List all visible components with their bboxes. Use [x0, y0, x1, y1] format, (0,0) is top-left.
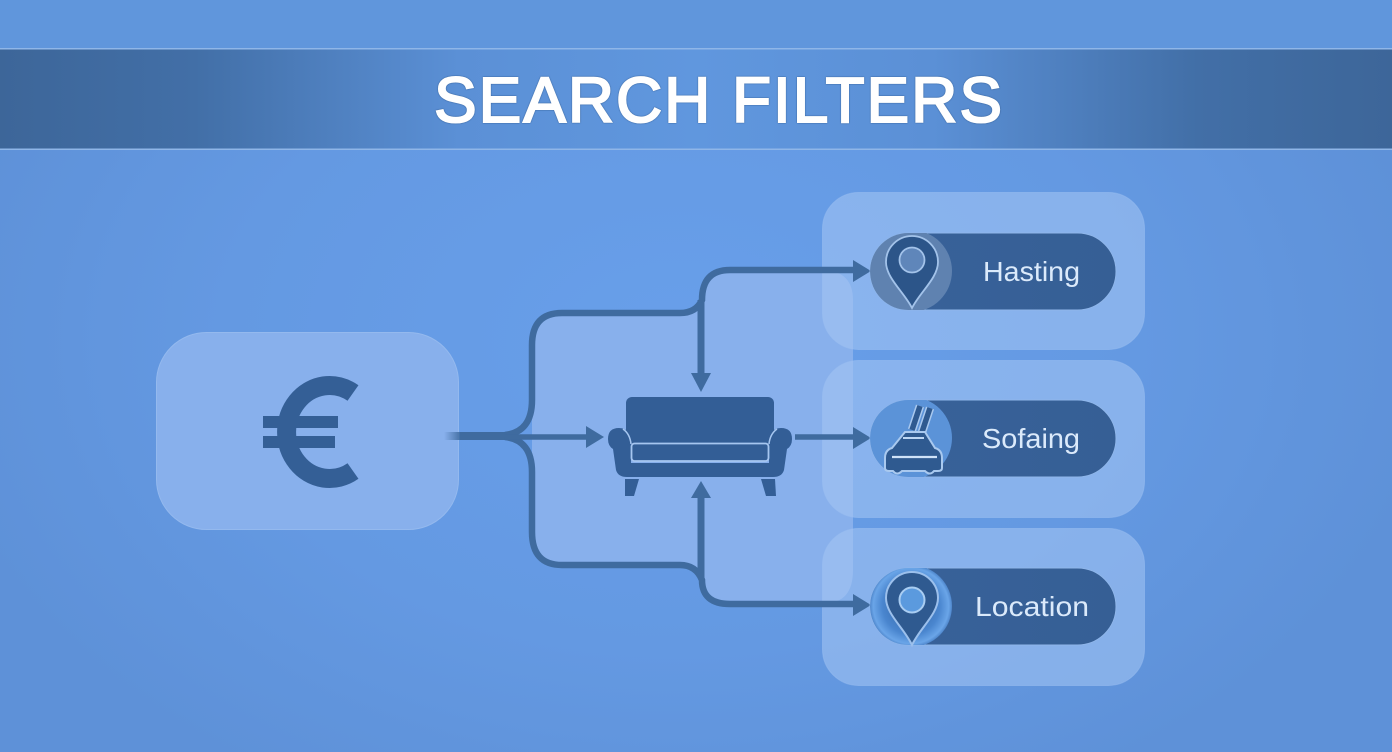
panel: hasting group: [822, 192, 1144, 350]
pill: sofaing: [870, 397, 1116, 479]
label: hasting: Hasting: [983, 256, 1080, 287]
panel: sofaing group: [822, 360, 1144, 518]
panel: central sofa area: [532, 270, 853, 603]
icon: sofa: [608, 397, 792, 496]
panel: location group: [822, 528, 1144, 686]
arrow: to hasting: [853, 260, 871, 282]
arrow: to sofaing: [853, 427, 871, 449]
connector network: [444, 270, 858, 604]
icon: vacuum: [870, 397, 952, 479]
arrow: down to sofa: [691, 373, 711, 392]
panel: budget: [156, 332, 458, 530]
pill: location: [870, 565, 1116, 647]
pill: hasting: [870, 230, 1116, 312]
arrow: to location: [853, 594, 871, 616]
title band: [0, 0, 1392, 150]
icon: pin: [870, 230, 952, 312]
icon: euro: [263, 386, 353, 478]
arrow: to sofa from left: [586, 426, 604, 448]
icon: pin glowing: [870, 565, 952, 647]
title: SEARCH FILTERS: [434, 64, 1002, 136]
label: location: Location: [975, 591, 1089, 622]
arrow: up to sofa: [691, 481, 711, 498]
label: sofaing: Sofaing: [982, 423, 1080, 454]
